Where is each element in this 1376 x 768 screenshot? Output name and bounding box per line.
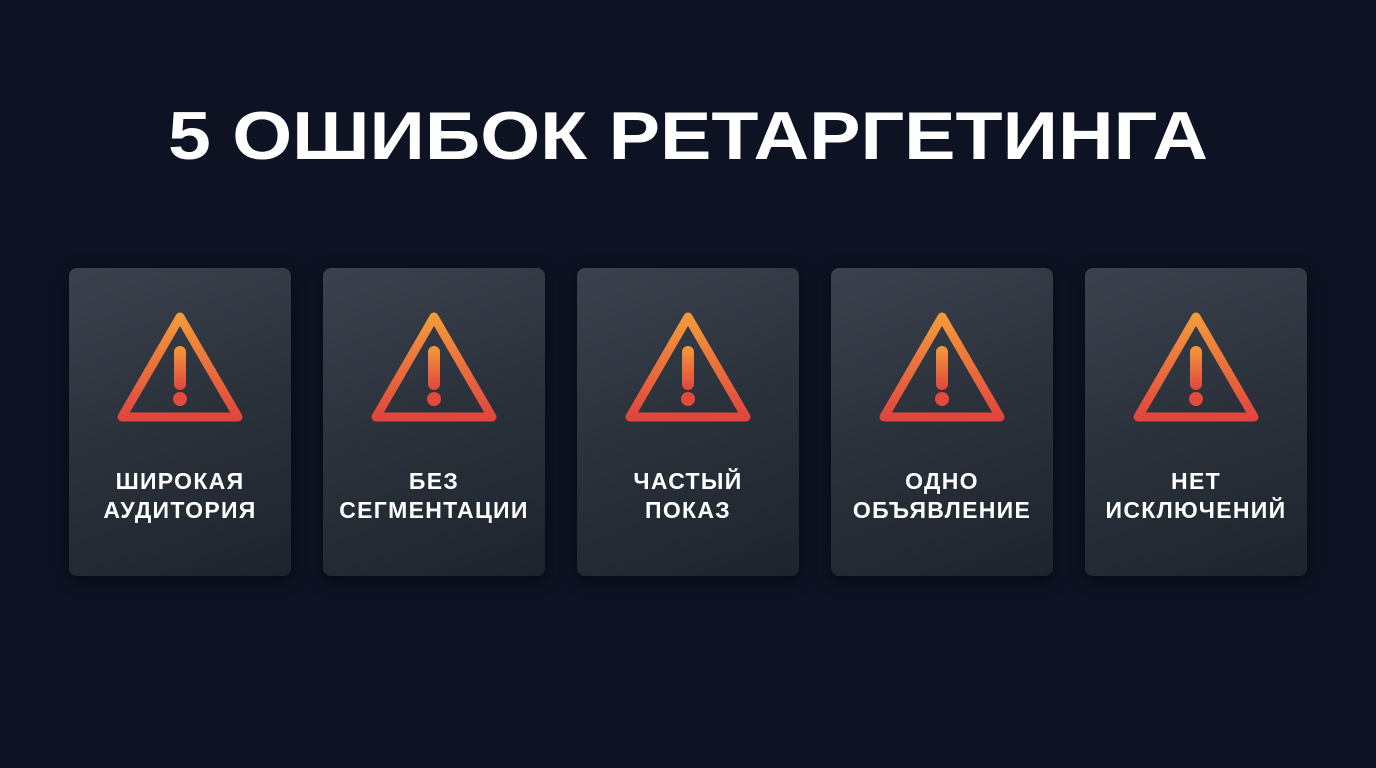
- label: БЕЗ: [409, 468, 459, 494]
- label: ШИРОКАЯ: [116, 468, 244, 494]
- card 5: [1085, 268, 1307, 576]
- icon: warning: [118, 312, 242, 422]
- label: [853, 468, 1031, 523]
- icon: warning: [626, 312, 750, 422]
- card 3: [577, 268, 799, 576]
- label: ЧАСТЫЙ: [633, 468, 743, 494]
- card 2: [323, 268, 545, 576]
- label: ИСКЛЮЧЕНИЙ: [1106, 497, 1286, 523]
- label: ОБЪЯВЛЕНИЕ: [853, 497, 1031, 523]
- label: ОДНО: [905, 468, 979, 494]
- icon: warning: [880, 312, 1004, 422]
- label: АУДИТОРИЯ: [103, 497, 257, 523]
- label: [103, 468, 257, 523]
- icon: warning: [1134, 312, 1258, 422]
- icon: warning: [372, 312, 496, 422]
- card 1: [69, 268, 291, 576]
- label: НЕТ: [1171, 468, 1221, 494]
- label: [339, 468, 529, 523]
- title: 5 ОШИБОК РЕТАРГЕТИНГА: [168, 98, 1208, 174]
- label: ПОКАЗ: [645, 497, 731, 523]
- card 4: [831, 268, 1053, 576]
- label: [633, 468, 743, 523]
- label: [1106, 468, 1286, 523]
- label: СЕГМЕНТАЦИИ: [339, 497, 529, 523]
